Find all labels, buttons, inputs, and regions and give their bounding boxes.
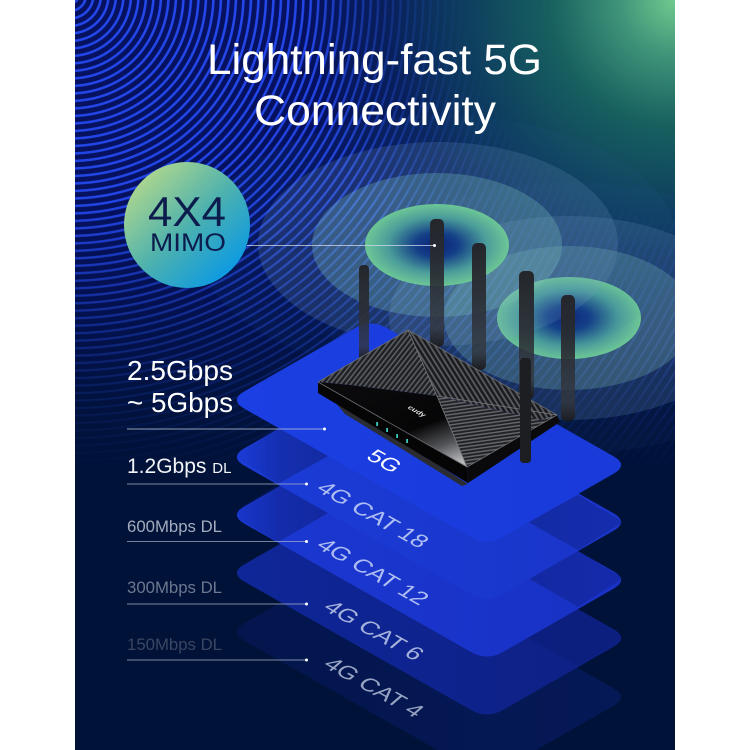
speed label: CAT 12 [127, 520, 308, 543]
layer: 4G CAT 6 [236, 544, 622, 714]
title: Lightning-fast 5G [207, 36, 542, 84]
speed label: CAT 4: 150Mbps DL [127, 635, 222, 654]
router status LEDs [376, 422, 408, 443]
background: thin concentric signal arcs [75, 0, 675, 750]
layer label: 5G: 5G [361, 445, 408, 477]
layer: 4G CAT 12 [236, 484, 622, 656]
background: colour glow and dark fade [75, 0, 675, 750]
speed label: CAT 6 [127, 581, 308, 606]
speed label: 5G: ~ 5Gbps [127, 387, 233, 418]
speed label: 5G: 2.5Gbps [127, 355, 233, 386]
layer label: 4G CAT 18: 4G CAT 18 [311, 477, 435, 552]
speed label: CAT 4 [127, 638, 308, 662]
4X4 MIMO badge [124, 162, 250, 288]
speed label: CAT 18 [127, 455, 308, 486]
layer: 4G CAT 4 [237, 602, 621, 750]
speed label: CAT 18: 1.2Gbps DL [127, 455, 231, 478]
infographic artwork [124, 43, 675, 750]
speed label: CAT 12: 600Mbps DL [127, 517, 222, 536]
signal rings: first antenna group [258, 142, 618, 346]
signal rings: second antenna group [389, 216, 675, 420]
rear antennas [359, 219, 575, 421]
layer: 4G CAT 18 [236, 428, 622, 579]
layer label: 4G CAT 12: 4G CAT 12 [311, 534, 435, 609]
speed label: CAT 6: 300Mbps DL [127, 578, 222, 597]
title [207, 36, 542, 135]
router logo: cudy [405, 404, 429, 419]
4X4 MIMO badge: MIMO [150, 229, 226, 257]
infographic panel [75, 0, 675, 750]
title: Connectivity [254, 87, 497, 135]
background: thick concentric signal arcs [75, 0, 420, 372]
4X4 MIMO badge: 4X4 [148, 188, 226, 235]
layer: 5G [237, 323, 621, 542]
speed label: 5G [127, 355, 326, 430]
MIMO callout line [247, 244, 436, 247]
router body [318, 330, 560, 486]
layer label: 4G CAT 6: 4G CAT 6 [318, 596, 430, 664]
front antenna [520, 358, 531, 463]
layer label: 4G CAT 4: 4G CAT 4 [318, 653, 430, 721]
